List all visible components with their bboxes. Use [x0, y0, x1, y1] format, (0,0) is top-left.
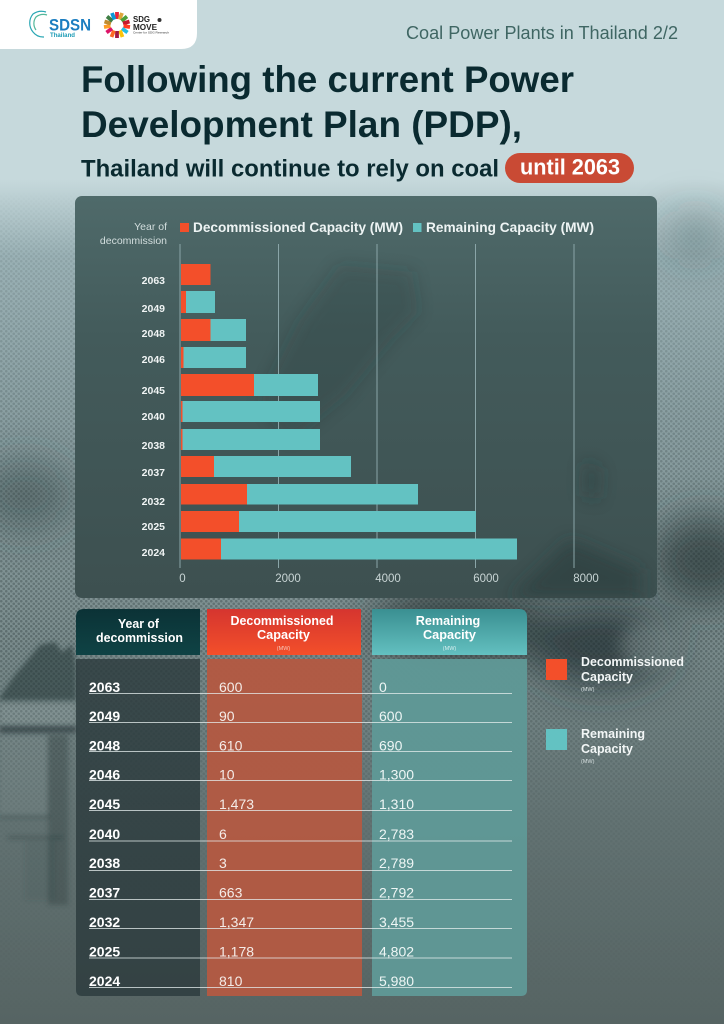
legend: decommissioned capacity: Decommissioned	[581, 654, 684, 669]
column: year of decommission: decommission	[96, 630, 183, 645]
chart axis title	[100, 221, 167, 247]
legend: remaining capacity	[546, 726, 645, 765]
bars	[181, 264, 517, 560]
chart legend: Remaining Capacity (MW)	[426, 219, 594, 235]
table rows: years	[89, 679, 120, 989]
year labels: 2063	[142, 275, 165, 287]
year labels	[142, 275, 165, 559]
table rows: remaining values: 600	[379, 708, 403, 724]
legend: remaining capacity: Remaining	[581, 726, 645, 741]
column: decommissioned capacity	[207, 609, 362, 996]
column: decommissioned capacity: (MW)	[277, 646, 290, 652]
series label: Coal Power Plants in Thailand 2/2	[406, 23, 678, 43]
logo panel	[0, 0, 197, 49]
legend: decommissioned capacity	[546, 654, 684, 693]
table rows: decommissioned values: 1,347	[219, 914, 254, 930]
x axis labels: 8000	[573, 573, 599, 585]
title	[81, 59, 574, 182]
year labels: 2025	[142, 521, 165, 533]
year labels: 2040	[142, 411, 165, 423]
column: remaining capacity: (MW)	[443, 646, 456, 652]
table rows: years: 2048	[89, 738, 120, 754]
table rows: years: 2063	[89, 679, 120, 695]
table rows: remaining values: 2,783	[379, 826, 414, 842]
year labels: 2038	[142, 440, 165, 452]
table rows: remaining values: 690	[379, 738, 403, 754]
x axis labels: 6000	[473, 573, 499, 585]
table rows: decommissioned values: 3	[219, 855, 227, 871]
table rows: remaining values: 1,310	[379, 796, 414, 812]
legend: decommissioned capacity: Capacity	[581, 669, 634, 684]
table rows: decommissioned values: 663	[219, 884, 243, 900]
year labels: 2032	[142, 496, 165, 508]
year labels: 2046	[142, 354, 165, 366]
table rows: decommissioned values: 610	[219, 738, 243, 754]
table rows: remaining values: 5,980	[379, 973, 414, 989]
year labels: 2048	[142, 328, 165, 340]
table rows: remaining values	[379, 679, 414, 989]
title: Following the current Power	[81, 59, 574, 100]
x axis labels	[179, 573, 599, 585]
table rows: remaining values: 1,300	[379, 766, 414, 782]
logo: SDSN Thailand: SDSN	[49, 16, 91, 34]
legend: decommissioned capacity: (MW)	[581, 687, 595, 693]
table rows: years: 2046	[89, 766, 120, 782]
table rows: years: 2024	[89, 973, 120, 989]
table rows: decommissioned values: 6	[219, 826, 227, 842]
table rows: decommissioned values	[219, 679, 254, 989]
table rows: years: 2025	[89, 944, 120, 960]
legend: remaining capacity: Capacity	[581, 741, 634, 756]
highlight pill: until 2063: until 2063	[520, 154, 620, 180]
table rows: years: 2045	[89, 796, 120, 812]
table rows: decommissioned values: 810	[219, 973, 243, 989]
table rows: years: 2032	[89, 914, 120, 930]
smoke shape inside chart	[260, 265, 640, 598]
logo: SDG Move: MOVE	[133, 22, 157, 32]
table rows: years: 2038	[89, 855, 120, 871]
year labels: 2049	[142, 303, 165, 315]
chart axis title: decommission	[100, 235, 167, 247]
x axis labels: 0	[179, 573, 186, 585]
logo: SDG Move: SDG	[133, 14, 150, 24]
table rows: years: 2049	[89, 708, 120, 724]
chart legend	[180, 219, 594, 235]
table rows: decommissioned values: 600	[219, 679, 243, 695]
year labels: 2024	[142, 547, 165, 559]
table rows: decommissioned values: 1,473	[219, 796, 254, 812]
x axis labels: 4000	[375, 573, 401, 585]
table rows: remaining values: 4,802	[379, 944, 414, 960]
column: decommissioned capacity: Capacity	[257, 627, 311, 642]
table rows: decommissioned values: 10	[219, 766, 235, 782]
table rows: remaining values: 3,455	[379, 914, 414, 930]
panel: bar chart	[75, 196, 657, 598]
x axis labels: 2000	[275, 573, 301, 585]
table rows: remaining values: 2,792	[379, 884, 414, 900]
logo: SDG Move	[104, 12, 169, 38]
table rows: decommissioned values: 90	[219, 708, 235, 724]
logo: SDSN Thailand: Thailand	[50, 32, 75, 39]
column: remaining capacity: Remaining	[416, 613, 480, 628]
column: year of decommission: Year of	[118, 616, 160, 631]
table row lines	[89, 694, 512, 988]
table rows: remaining values: 2,789	[379, 855, 414, 871]
title: Development Plan (PDP),	[81, 104, 522, 145]
legend: remaining capacity: (MW)	[581, 759, 595, 765]
chart grid lines	[180, 244, 574, 568]
chart legend: Decommissioned Capacity (MW)	[193, 219, 403, 235]
highlight pill: until 2063	[505, 153, 634, 183]
logo: SDG Move: Center for SDG Research	[133, 30, 169, 34]
table rows: decommissioned values: 1,178	[219, 944, 254, 960]
table	[76, 609, 527, 996]
column: remaining capacity	[372, 609, 527, 996]
column: decommissioned capacity: Decommissioned	[230, 613, 334, 628]
table rows: years: 2040	[89, 826, 120, 842]
logo: SDSN Thailand	[30, 11, 91, 39]
year labels: 2045	[142, 385, 165, 397]
year labels: 2037	[142, 467, 165, 479]
column: year of decommission	[76, 609, 200, 996]
chart axis title: Year of	[134, 221, 167, 233]
title: Thailand will continue to rely on coal	[81, 156, 499, 182]
table rows: remaining values: 0	[379, 679, 387, 695]
table rows: years: 2037	[89, 884, 120, 900]
column: remaining capacity: Capacity	[423, 627, 477, 642]
